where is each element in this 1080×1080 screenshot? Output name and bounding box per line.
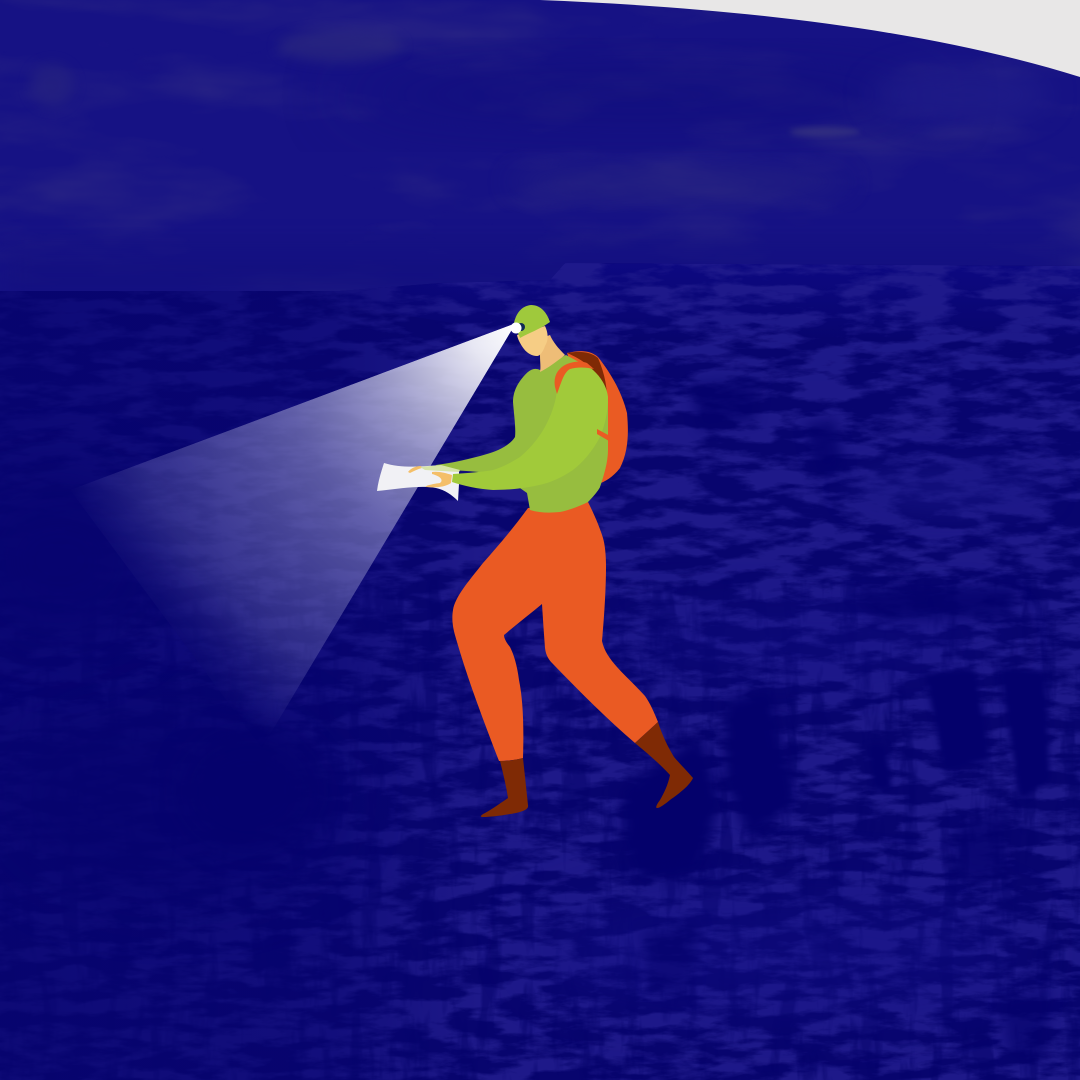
side strap	[597, 429, 610, 441]
face	[517, 326, 548, 356]
night sky with clouds	[0, 0, 1080, 300]
cap	[514, 305, 550, 338]
torso and back arm	[436, 355, 608, 513]
headlamp	[510, 322, 525, 334]
front arm	[452, 365, 608, 490]
map	[377, 463, 459, 501]
canyon landscape	[0, 263, 1080, 1080]
mesa in the distance	[399, 264, 1080, 308]
headlamp light beam	[86, 324, 512, 716]
dark canyon shadows	[622, 380, 1050, 1060]
right boot	[635, 722, 693, 808]
hands	[408, 466, 452, 487]
backpack strap	[555, 362, 594, 394]
hiker figure	[377, 305, 693, 817]
backpack	[567, 351, 628, 484]
neck	[537, 335, 565, 372]
white arc at top right	[540, 0, 1080, 77]
cuff highlight	[420, 465, 460, 472]
legs: orange trousers	[452, 502, 658, 761]
left boot	[481, 758, 528, 817]
